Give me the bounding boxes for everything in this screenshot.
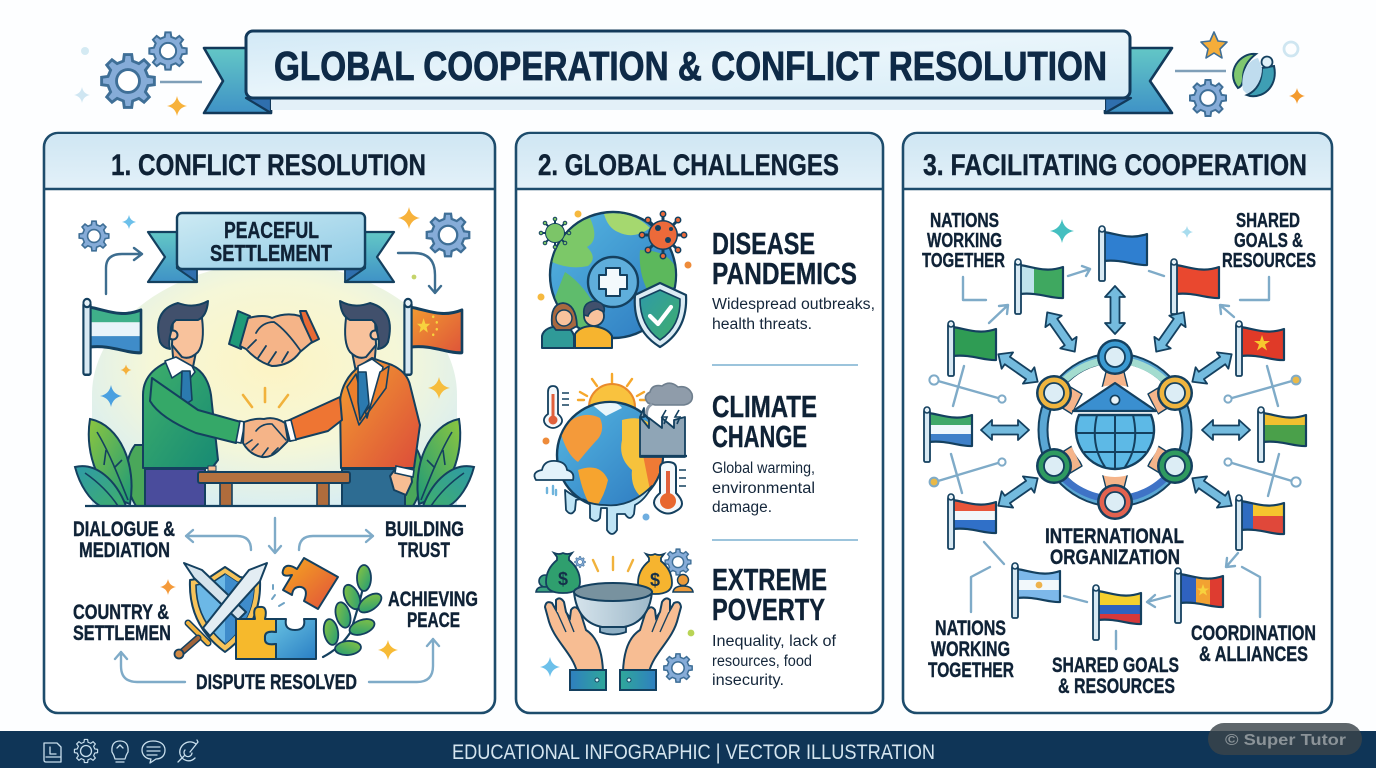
label: shared goals top: RESOURCES — [1222, 250, 1316, 272]
icon: shield and crossed swords — [174, 563, 267, 658]
label: coordination and alliances: COORDINATION — [1191, 622, 1316, 645]
table — [198, 472, 350, 506]
label: achieving peace — [388, 588, 478, 632]
label: building trust: TRUST — [398, 539, 450, 562]
text: disease pandemics: health threats. — [712, 316, 812, 333]
icon: extreme poverty: $ — [558, 569, 568, 589]
banner: peaceful settlement: PEACEFUL — [224, 217, 319, 243]
icon: light bulb — [112, 741, 128, 762]
text: disease pandemics: DISEASE — [712, 226, 815, 261]
text: extreme poverty: Inequality, lack of — [712, 633, 837, 650]
label: nations working together bottom: TOGETHER — [928, 659, 1014, 682]
flag: left nation — [83, 299, 147, 375]
flag: blue — [1099, 226, 1152, 281]
label: shared goals bottom: & RESOURCES — [1058, 675, 1175, 698]
panel frame — [903, 133, 1332, 713]
panel header — [903, 134, 1332, 189]
label: country and settlement: COUNTRY & — [73, 601, 169, 624]
text: disease pandemics: Widespread outbreaks, — [712, 296, 875, 313]
hub: international organization — [1036, 339, 1193, 520]
label: nations working together top — [922, 210, 1005, 272]
label: nations working together top: WORKING — [927, 230, 1002, 252]
icon: floating handshake — [229, 311, 319, 366]
icon: gear — [74, 739, 98, 763]
flag: red orange — [1171, 259, 1224, 314]
icon: central handshake — [243, 418, 288, 457]
text: extreme poverty: resources, food — [712, 653, 812, 670]
figure: left diplomat — [143, 301, 245, 506]
hub nodes — [1036, 339, 1193, 520]
banner: peaceful settlement — [148, 213, 394, 282]
text: climate change: damage. — [712, 499, 772, 516]
icon: speech bubble — [142, 741, 165, 763]
panel frame — [516, 133, 883, 713]
icon: disease pandemics — [538, 210, 692, 348]
flags ring — [924, 226, 1311, 640]
label: nations working together top: NATIONS — [930, 210, 999, 232]
flag: green — [948, 321, 1001, 376]
label: international organization — [1045, 525, 1184, 569]
text: extreme poverty — [712, 562, 837, 689]
text: climate change: Global warming, — [712, 460, 815, 477]
icon: climate change — [534, 374, 692, 534]
icon: olive branch — [322, 565, 385, 657]
icon: extreme poverty: $ — [650, 570, 660, 590]
label: country and settlement: SETTLEMEN — [73, 622, 171, 645]
panel header — [44, 134, 495, 189]
flag: right nation — [404, 299, 468, 375]
watermark: super tutor — [1208, 723, 1362, 755]
nodes: small connector lines — [929, 375, 1301, 487]
label: dialogue and mediation — [73, 518, 175, 562]
flag: yellow blue red — [1093, 585, 1146, 640]
label: achieving peace: PEACE — [407, 609, 460, 632]
title plaque — [246, 31, 1130, 98]
label: shared goals bottom — [1052, 654, 1179, 698]
ribbon tail left — [204, 48, 271, 113]
connector lines — [951, 266, 1279, 649]
footer caption: EDUCATIONAL INFOGRAPHIC | VECTOR ILLUSTRATION — [452, 741, 935, 764]
label: coordination and alliances: & ALLIANCES — [1199, 643, 1308, 666]
text: extreme poverty: EXTREME — [712, 562, 827, 597]
text: disease pandemics: PANDEMICS — [712, 256, 857, 291]
label: dispute resolved: DISPUTE RESOLVED — [196, 671, 357, 694]
decoration: left gears and stars — [74, 32, 202, 116]
icon: plants — [75, 419, 474, 506]
footer icons — [44, 739, 198, 763]
text: extreme poverty: insecurity. — [712, 672, 784, 689]
text: climate change: environmental — [712, 480, 815, 497]
panel header — [516, 134, 883, 189]
label: building trust: BUILDING — [385, 518, 464, 541]
label: international organization: ORGANIZATION — [1050, 546, 1180, 569]
icon: puzzle pieces — [236, 558, 338, 659]
text: climate change — [712, 389, 817, 516]
label: shared goals top: GOALS & — [1234, 230, 1303, 252]
banner: peaceful settlement: SETTLEMENT — [210, 240, 332, 266]
label: shared goals bottom: SHARED GOALS — [1052, 654, 1179, 677]
text: extreme poverty: POVERTY — [712, 592, 825, 627]
decoration: right star, gear and globe — [1175, 32, 1305, 116]
label: shared goals top — [1222, 210, 1316, 272]
panel header: 1. CONFLICT RESOLUTION — [111, 149, 426, 182]
panel header: 2. GLOBAL CHALLENGES — [538, 149, 839, 182]
hub building and globe — [1073, 383, 1156, 469]
hub spokes — [1056, 368, 1174, 492]
icon: book — [44, 743, 61, 762]
flag: red white blue — [948, 494, 1001, 549]
text: climate change: CHANGE — [712, 419, 807, 454]
flag: green white blue — [924, 407, 977, 462]
label: achieving peace: ACHIEVING — [388, 588, 478, 611]
icon: spark rays — [243, 388, 288, 407]
label: shared goals top: SHARED — [1236, 210, 1300, 232]
panel: global challenges — [516, 133, 883, 713]
double arrows — [981, 286, 1250, 514]
arrows: flow cycle — [115, 518, 439, 682]
icon: gears and sparkles — [79, 207, 469, 407]
flag: light blue and green — [1015, 259, 1068, 314]
label: building trust — [385, 518, 464, 562]
title text: GLOBAL COOPERATION & CONFLICT RESOLUTION — [274, 43, 1107, 89]
panel: conflict resolution — [44, 133, 495, 713]
text: climate change: CLIMATE — [712, 389, 817, 424]
watermark: super tutor: © Super Tutor — [1225, 732, 1346, 749]
figure: right diplomat — [285, 301, 420, 506]
label: nations working together bottom — [928, 617, 1014, 682]
ribbon tail right — [1105, 48, 1172, 113]
label: country and settlement — [73, 601, 171, 645]
label: dialogue and mediation: DIALOGUE & — [73, 518, 175, 541]
flag: red with star — [1236, 321, 1289, 376]
text: disease pandemics — [712, 226, 875, 333]
flag: blue orange red with star — [1175, 568, 1228, 623]
label: dialogue and mediation: MEDIATION — [79, 539, 170, 562]
icon: extreme poverty — [536, 549, 694, 690]
label: coordination and alliances — [1191, 622, 1316, 666]
background halo — [92, 262, 457, 506]
arrow: from banner to flag — [398, 253, 441, 293]
label: international organization: INTERNATIONAL — [1045, 525, 1184, 548]
icon: target — [178, 740, 198, 762]
flag: blue yellow red — [1236, 495, 1289, 550]
arrow: from flag to banner — [106, 248, 142, 294]
footer bar — [0, 731, 1376, 768]
flag: pale blue with sun — [1012, 563, 1065, 618]
panel: facilitating cooperation — [903, 133, 1332, 713]
panel frame — [44, 133, 495, 713]
title banner — [74, 31, 1305, 116]
label: nations working together top: TOGETHER — [922, 250, 1005, 272]
icon: sparkles — [160, 579, 398, 660]
flag: yellow green — [1258, 407, 1311, 462]
label: nations working together bottom: NATIONS — [935, 617, 1006, 640]
panel header: 3. FACILITATING COOPERATION — [923, 149, 1307, 182]
icon: sparkles — [1050, 219, 1193, 243]
label: nations working together bottom: WORKING — [931, 638, 1010, 661]
